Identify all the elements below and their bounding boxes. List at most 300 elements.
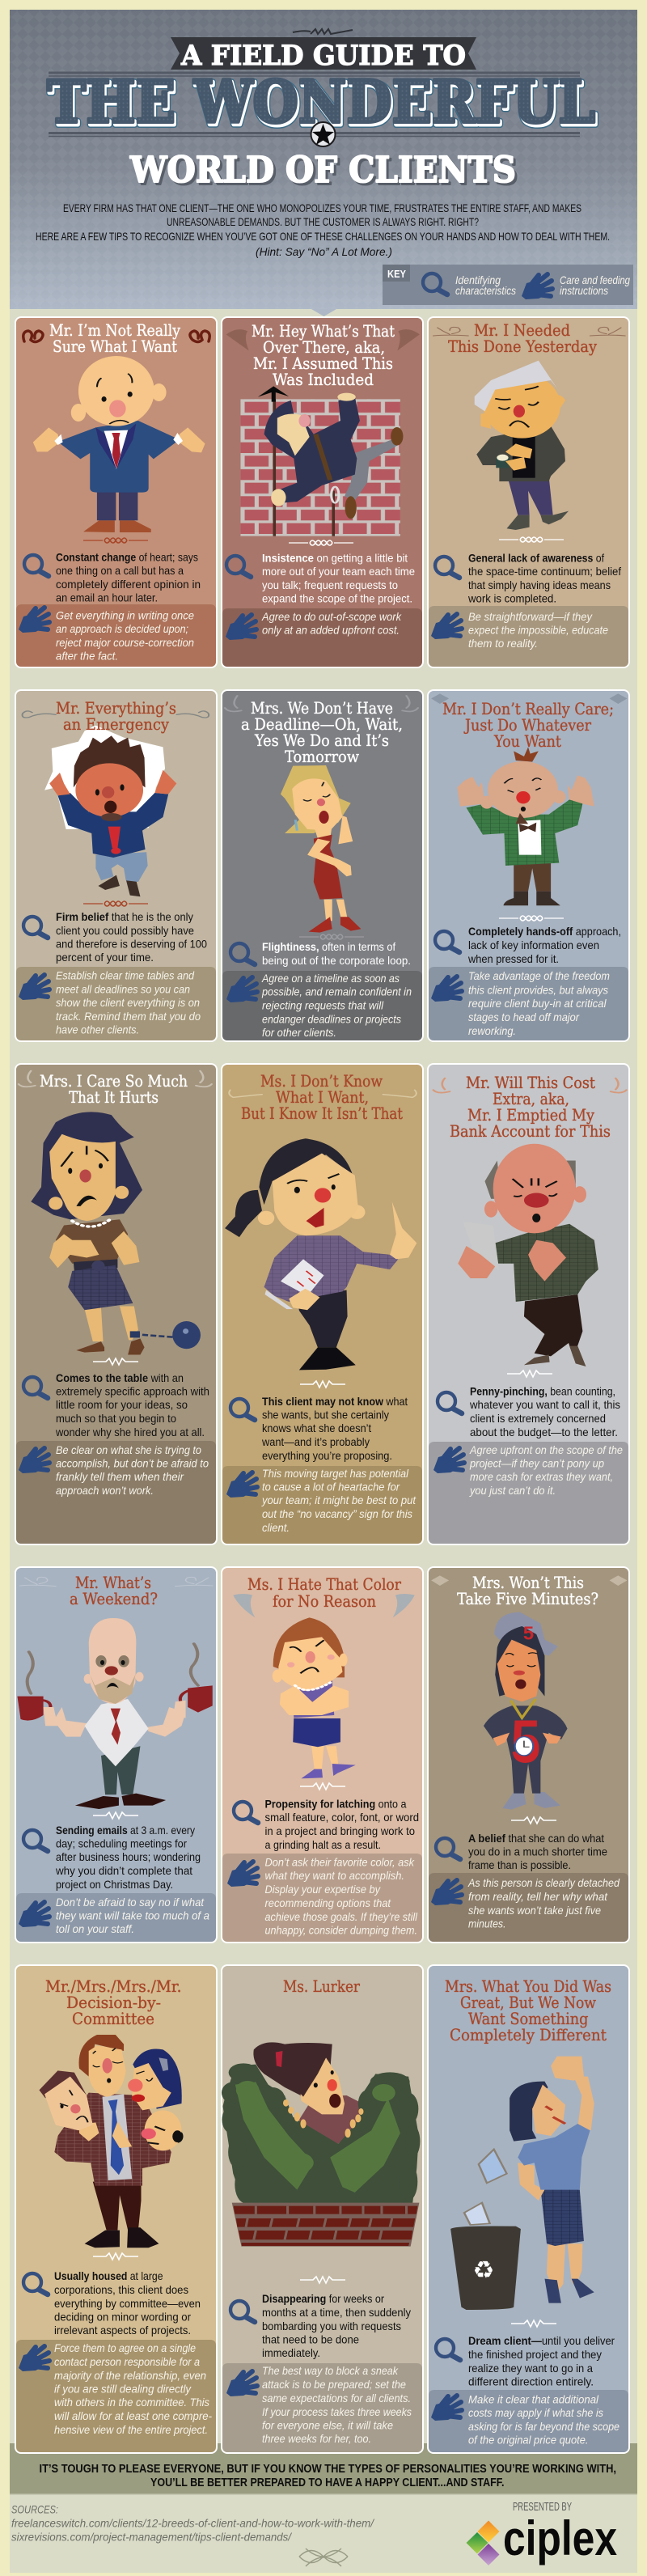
icon: magnifier <box>226 556 251 577</box>
care text: rejecting requests that will <box>262 998 384 1011</box>
illustration: panicked man <box>44 726 176 896</box>
illustration: man climbing brick wall <box>240 386 403 536</box>
characteristics text: everything by committee—even <box>54 2297 201 2310</box>
heading: Want Something <box>468 2009 589 2028</box>
care text <box>468 969 610 1037</box>
care text: if you are still dealing directly <box>54 2382 192 2395</box>
care text: Don’t ask their favorite color, ask <box>265 1856 415 1869</box>
heading: for No Reason <box>273 1591 376 1611</box>
characteristics text: day; scheduling meetings for <box>56 1837 187 1849</box>
care text: Agree upfront on the scope of the <box>469 1443 623 1456</box>
characteristics text: client is extremely concerned <box>470 1412 606 1425</box>
care text: possible, and remain confident in <box>261 985 412 998</box>
care text: costs may apply if what she is <box>468 2406 603 2419</box>
care text <box>56 608 194 662</box>
care text: attack is to be prepared; set the <box>262 2378 406 2391</box>
intro text <box>36 201 610 258</box>
characteristics text: Flightiness, often in terms of <box>262 940 395 953</box>
characteristics text: you do in a much shorter time <box>468 1845 607 1858</box>
divider <box>507 1371 552 1377</box>
key legend <box>383 265 633 305</box>
characteristics text: client you could possibly have <box>56 924 194 937</box>
characteristics text: Sending emails at 3 a.m. every <box>56 1824 195 1837</box>
divider <box>299 934 364 939</box>
care text: them to reality. <box>468 637 538 650</box>
care text <box>56 1896 209 1935</box>
sources: sixrevisions.com/project-management/tips-client-demands/ <box>11 2531 293 2544</box>
heading <box>445 1976 611 2044</box>
key legend: Identifying <box>455 273 501 286</box>
care text: out the “no vacancy” sign for this <box>262 1507 412 1520</box>
heading: Tomorrow <box>285 747 359 766</box>
characteristics text <box>55 1371 209 1438</box>
icon: hand <box>431 2396 462 2421</box>
heading: Mrs. We Don’t Have <box>251 698 393 718</box>
heading: Mr. What’s <box>75 1573 151 1592</box>
heading: Take Five Minutes? <box>457 1589 598 1608</box>
illustration: woman wagging finger <box>225 1138 417 1370</box>
care text: The best way to block a sneak <box>262 2364 399 2377</box>
characteristics text: Penny-pinching, bean counting, <box>470 1385 615 1398</box>
care text <box>261 610 402 636</box>
key legend: Care and feeding <box>560 273 630 286</box>
care text: Be clear on what she is trying to <box>56 1443 201 1456</box>
care text: toll on your staff. <box>56 1922 134 1935</box>
care text: your team; it might be best to put <box>261 1493 417 1506</box>
panel: not really sure <box>15 317 217 667</box>
care text: same expectations for all clients. <box>262 2392 411 2404</box>
characteristics text: corporations, this client does <box>54 2283 188 2296</box>
characteristics text: one thing on a call but has a <box>56 564 184 577</box>
characteristics text: small feature, color, font, or word <box>265 1811 419 1824</box>
care text: frankly tell them when their <box>56 1470 184 1483</box>
care text: track. Remind them that you do <box>56 1010 201 1023</box>
characteristics text: after business hours; wondering <box>56 1850 201 1863</box>
panel: will this cost extra <box>428 1064 629 1544</box>
characteristics text: expand the scope of the project. <box>262 592 412 605</box>
heading: Mr. Everything’s <box>56 698 176 718</box>
heading ornaments <box>19 1071 212 1087</box>
heading ornaments <box>229 1090 417 1097</box>
illustration: woman hiding in bush <box>222 2042 420 2247</box>
illustration: woman in track suit with number five: 5 <box>523 1624 534 1644</box>
presented by ciplex logo <box>466 2501 617 2565</box>
care text <box>54 2341 212 2436</box>
icon: magnifier <box>23 917 48 938</box>
characteristics text: that simply having ideas means <box>468 578 611 591</box>
panel: what's a weekend <box>15 1567 217 1943</box>
care text: an approach is decided upon; <box>56 622 188 635</box>
heading ornaments <box>433 327 625 336</box>
heading <box>56 698 176 734</box>
care text: approach won’t work. <box>56 1484 154 1497</box>
care text: for other clients. <box>262 1026 336 1039</box>
care text: have other clients. <box>56 1023 139 1036</box>
care text: she wants won’t take just five <box>468 1904 601 1917</box>
heading: Committee <box>72 2009 154 2028</box>
heading <box>252 321 395 389</box>
key legend: characteristics <box>455 284 516 297</box>
title: the wonderful: THE WONDERFUL <box>49 70 597 138</box>
characteristics text: a grinding halt as a result. <box>265 1838 381 1851</box>
characteristics text: Completely hands-off approach, <box>468 925 621 938</box>
characteristics text: knows what she doesn’t <box>262 1421 371 1434</box>
characteristics text <box>468 2334 615 2388</box>
characteristics text: different direction entirely. <box>468 2375 594 2388</box>
characteristics text: wonder why she hired you at all. <box>55 1426 205 1438</box>
care text <box>56 969 201 1036</box>
characteristics text <box>261 1395 408 1462</box>
heading ornaments <box>23 331 209 341</box>
characteristics text: Disappearing for weeks or <box>262 2292 384 2305</box>
icon: hand <box>19 1902 49 1927</box>
icon: hand <box>19 2346 49 2371</box>
heading <box>45 1976 181 2028</box>
divider <box>300 1381 345 1388</box>
care text <box>468 610 608 650</box>
panel: care so much <box>15 1064 217 1544</box>
icon: magnifier <box>24 555 49 576</box>
illustration: angry bald man with receipt <box>458 1144 598 1366</box>
header panel <box>10 10 637 316</box>
icon: magnifier <box>23 1377 48 1398</box>
panel: everything's an emergency <box>15 690 217 1041</box>
characteristics text: months at a time, then suddenly <box>262 2306 411 2319</box>
characteristics text: whatever you want to call it, this <box>469 1398 620 1411</box>
care text: hensive view of the entire project. <box>54 2423 208 2436</box>
care text: you just can’t do it. <box>469 1484 556 1497</box>
characteristics text: being out of the corporate loop. <box>262 954 411 967</box>
panel: don't really care <box>428 690 629 1041</box>
heading: This Done Yesterday <box>448 337 598 356</box>
care text: only at an added upfront cost. <box>262 623 400 636</box>
icon: hand <box>226 1472 257 1498</box>
characteristics text <box>262 940 411 967</box>
heading <box>442 699 614 751</box>
characteristics text <box>54 2269 201 2337</box>
heading: Mrs. I Care So Much <box>40 1071 188 1091</box>
divider <box>300 2277 345 2283</box>
title: the wonderful: THE WONDERFUL <box>47 67 595 136</box>
care text: contact person responsible for a <box>54 2355 200 2368</box>
icon: hand <box>226 977 257 1002</box>
characteristics text <box>56 910 207 964</box>
characteristics text: immediately. <box>262 2346 320 2359</box>
care text: more cash for extras they want, <box>470 1470 613 1483</box>
panel: decision by committee <box>15 1965 217 2453</box>
characteristics text: General lack of awareness of <box>468 552 604 565</box>
icon: hand <box>19 608 49 633</box>
characteristics text <box>469 1385 620 1438</box>
illustration: woman with ball and chain <box>31 1112 201 1355</box>
illustration: man with raised hands <box>457 747 594 905</box>
illustration: blonde woman in red dress <box>281 765 361 933</box>
characteristics text <box>468 1832 607 1871</box>
heading: What I Want, <box>276 1087 369 1107</box>
heading <box>241 698 403 766</box>
illustration: woman in track suit with number five: 5 <box>511 1707 540 1776</box>
care text: endanger deadlines or projects <box>262 1013 401 1026</box>
panel: won't this take five minutes <box>428 1567 629 1943</box>
divider <box>499 537 564 542</box>
heading: Ms. I Hate That Color <box>247 1574 401 1594</box>
care text: client. <box>262 1521 290 1534</box>
heading ornaments <box>225 696 418 711</box>
heading: Ms. I Don’t Know <box>260 1071 383 1091</box>
characteristics text <box>265 1798 419 1851</box>
care text: Get everything in writing once <box>56 608 194 621</box>
characteristics text: Insistence on getting a little bit <box>262 552 408 565</box>
characteristics text: more out of your team each time <box>262 565 415 578</box>
divider <box>83 538 148 543</box>
characteristics text: the finished project and they <box>468 2348 602 2361</box>
care text: will allow for at least one compre- <box>54 2409 212 2422</box>
characteristics text: irrelevant aspects of projects. <box>54 2324 191 2337</box>
illustration: woman tossing work into recycling <box>450 2057 594 2310</box>
icon: magnifier <box>438 1392 462 1413</box>
characteristics text: in a project and bringing work to <box>265 1824 415 1837</box>
heading: Mr. I Assumed This <box>253 354 393 373</box>
care text: majority of the relationship, even <box>54 2369 206 2382</box>
characteristics text: you talk; frequent requests to <box>262 578 398 591</box>
illustration: shrugging man <box>33 356 205 532</box>
heading: Mr. I Don’t Really Care; <box>442 699 614 718</box>
illustration: woman with crossed arms <box>273 1617 356 1778</box>
divider <box>93 1358 138 1365</box>
heading ornaments <box>233 1594 415 1617</box>
characteristics text: work is completed. <box>467 592 556 605</box>
care text: project—if they can’t pony up <box>469 1456 604 1469</box>
care text: unhappy, consider dumping them. <box>265 1924 417 1937</box>
panel: ms. lurker <box>222 1965 423 2453</box>
care text: reject major course-correction <box>56 636 194 649</box>
characteristics text: Usually housed at large <box>54 2269 163 2282</box>
heading ornaments <box>226 329 420 350</box>
care text <box>467 1876 620 1930</box>
characteristics text: Comes to the table with an <box>56 1371 184 1384</box>
footer ornament <box>299 2548 348 2566</box>
care text: asking for is far beyond the scope <box>468 2420 620 2433</box>
panel: don't know what i want <box>222 1064 423 1544</box>
title: world of clients: WORLD OF CLIENTS <box>129 150 516 191</box>
characteristics text: Firm belief that he is the only <box>56 910 193 923</box>
title: a field guide to: A FIELD GUIDE TO <box>180 40 466 72</box>
heading: Over There, aka, <box>263 337 385 357</box>
icon: hand <box>227 1862 258 1887</box>
heading ornaments <box>431 1575 628 1586</box>
heading: Mr. I Emptied My <box>467 1105 595 1125</box>
icon: magnifier <box>436 2339 460 2360</box>
divider <box>93 2253 138 2260</box>
title: world of clients: WORLD OF CLIENTS <box>132 152 518 193</box>
panel: hate that color <box>222 1567 423 1943</box>
care text: what they want to accomplish. <box>265 1869 404 1882</box>
characteristics text: the space-time continuum; belief <box>468 565 621 578</box>
care text: stages to head off major <box>468 1010 580 1023</box>
heading: Bank Account for This <box>450 1121 611 1141</box>
illustration: man checking watch <box>475 361 569 530</box>
icon: recycling symbol: ♻ <box>473 2256 494 2285</box>
characteristics text: A belief that she can do what <box>468 1832 604 1845</box>
care text: expect the impossible, educate <box>468 623 608 636</box>
divider <box>83 901 148 906</box>
presented by ciplex logo: PRESENTED BY <box>513 2501 572 2514</box>
heading: Mr. I Needed <box>474 320 570 340</box>
care text: Force them to agree on a single <box>54 2341 196 2354</box>
care text: accomplish, but don’t be afraid to <box>56 1456 209 1469</box>
characteristics text: Propensity for latching onto a <box>265 1798 407 1811</box>
illustration: man carrying committee heads <box>39 2035 184 2248</box>
characteristics text: frame than is possible. <box>468 1858 571 1871</box>
key legend: KEY <box>387 268 406 280</box>
characteristics text: This client may not know what <box>262 1395 408 1408</box>
heading <box>241 1071 403 1123</box>
care text: minutes. <box>468 1917 506 1930</box>
pointer triangle <box>311 309 336 316</box>
care text: reworking. <box>468 1024 516 1037</box>
care text: this client provides, but always <box>468 984 608 997</box>
bottom summary band: YOU’LL BE BETTER PREPARED TO HAVE A HAPPY CLIENT...AND STAFF. <box>150 2476 505 2489</box>
heading: But I Know It Isn’t That <box>241 1104 403 1123</box>
care text <box>265 1856 418 1937</box>
heading ornaments <box>23 711 209 718</box>
care text: three weeks for her, too. <box>262 2432 371 2445</box>
care text: Agree on a timeline as soon as <box>261 972 400 985</box>
icon: magnifier <box>436 1838 460 1859</box>
characteristics text: and therefore is deserving of 100 <box>56 937 207 950</box>
characteristics text: lack of key information even <box>468 938 599 951</box>
care text: require client buy-in at critical <box>468 997 607 1010</box>
illustration: tired man with coffee <box>17 1618 213 1809</box>
icon: magnifier <box>23 1830 48 1851</box>
panel: hey what's that <box>222 317 423 667</box>
sources <box>11 2503 375 2544</box>
care text: from reality, tell her why what <box>468 1890 608 1903</box>
care text <box>261 1467 417 1534</box>
characteristics text: much so that you begin to <box>56 1412 176 1425</box>
heading <box>70 1573 158 1608</box>
heading: Mr./Mrs./Mrs./Mr. <box>45 1976 181 1996</box>
care text: for everyone else, it will take <box>262 2419 393 2432</box>
care text <box>262 2364 412 2445</box>
icon: hand <box>226 615 256 640</box>
heading: Mr. Will This Cost <box>466 1073 595 1092</box>
characteristics text: completely different opinion in <box>56 578 201 591</box>
characteristics text: project on Christmas Day. <box>56 1878 173 1891</box>
heading <box>40 1071 188 1107</box>
characteristics text: deciding on minor wording or <box>54 2311 191 2324</box>
heading: Ms. Lurker <box>283 1976 360 1996</box>
icon: hand <box>226 2371 257 2396</box>
divider <box>93 1812 138 1819</box>
characteristics text <box>262 552 415 605</box>
care text: Display your expertise by <box>265 1883 381 1896</box>
characteristics text: little room for your ideas, so <box>56 1398 188 1411</box>
sources: freelanceswitch.com/clients/12-breeds-of-client-and-how-to-work-with-them/ <box>11 2516 375 2529</box>
care text: they want will take too much of a <box>56 1909 209 1922</box>
characteristics text: extremely specific approach with <box>56 1385 209 1398</box>
icon: magnifier <box>435 931 459 952</box>
characteristics text <box>467 552 621 605</box>
heading <box>450 1073 611 1141</box>
care text: show the client everything is on <box>56 996 200 1009</box>
care text: achieve those goals. If they’re still <box>265 1910 418 1923</box>
care text: This moving target has potential <box>262 1467 409 1480</box>
characteristics text: want—and it’s probably <box>261 1435 370 1448</box>
title: the wonderful: THE WONDERFUL <box>47 67 595 136</box>
heading: a Weekend? <box>70 1589 158 1608</box>
intro text: (Hint: Say “No” A Lot More.) <box>256 245 392 258</box>
care text <box>56 1443 209 1497</box>
heading: Yes We Do and It’s <box>254 731 389 750</box>
heading: Extra, aka, <box>493 1089 569 1108</box>
bottom summary band <box>10 2443 637 2495</box>
icon: hand <box>431 1880 462 1905</box>
panel: something completely different <box>428 1965 629 2453</box>
divider <box>511 2320 556 2327</box>
characteristics text: that need to be done <box>262 2333 359 2346</box>
characteristics text <box>262 2292 411 2359</box>
care text: Don’t be afraid to say no if what <box>56 1896 205 1909</box>
icon: hand <box>431 614 462 639</box>
characteristics text: about the budget—to the letter. <box>470 1426 618 1438</box>
icon: magnifier <box>435 557 459 578</box>
care text: Make it clear that additional <box>468 2393 599 2406</box>
characteristics text: Dream client—until you deliver <box>468 2334 615 2347</box>
heading: Decision-by- <box>66 1993 161 2012</box>
characteristics text: she wants, but she certainly <box>262 1408 389 1421</box>
key legend: instructions <box>560 284 608 297</box>
heading ornaments <box>19 1577 213 1587</box>
heading: Mrs. What You Did Was <box>445 1976 611 1996</box>
care text: If your process takes three weeks <box>262 2405 412 2418</box>
presented by ciplex logo: ciplex <box>503 2511 617 2565</box>
heading: Sure What I Want <box>53 337 177 356</box>
heading: That It Hurts <box>69 1087 159 1107</box>
panel: needed yesterday <box>428 317 629 667</box>
divider <box>499 916 564 921</box>
sources: SOURCES: <box>11 2503 58 2516</box>
panel: we don't have a deadline <box>222 690 423 1041</box>
heading: Completely Different <box>450 2025 607 2044</box>
heading <box>49 320 181 356</box>
characteristics text: everything you’re proposing. <box>262 1449 392 1462</box>
heading: Mr. Hey What’s That <box>252 321 395 341</box>
divider <box>289 540 353 545</box>
icon: magnifier <box>23 2273 48 2294</box>
icon: magnifier <box>423 273 447 294</box>
icon: hand <box>431 977 462 1002</box>
characteristics text: bombarding you with requests <box>262 2320 401 2332</box>
care text: Take advantage of the freedom <box>468 969 610 982</box>
heading: Great, But We Now <box>460 1993 596 2012</box>
characteristics text: percent of your time. <box>56 951 154 964</box>
heading: an Emergency <box>63 714 170 734</box>
heading: a Deadline—Oh, Wait, <box>241 714 403 734</box>
icon: hand <box>433 1448 464 1473</box>
heading ornaments <box>431 693 628 704</box>
heading <box>247 1574 401 1611</box>
icon: magnifier <box>230 2301 255 2322</box>
top ornament <box>293 29 353 34</box>
intro text: UNREASONABLE DEMANDS. BUT THE CUSTOMER IS ALWAYS RIGHT. RIGHT? <box>167 215 479 228</box>
heading <box>448 320 598 356</box>
care text <box>261 972 412 1039</box>
illustration: woman in track suit with number five <box>484 1612 568 1810</box>
title rules <box>49 73 580 133</box>
heading <box>457 1573 598 1608</box>
heading: Mrs. Won’t This <box>472 1573 584 1592</box>
